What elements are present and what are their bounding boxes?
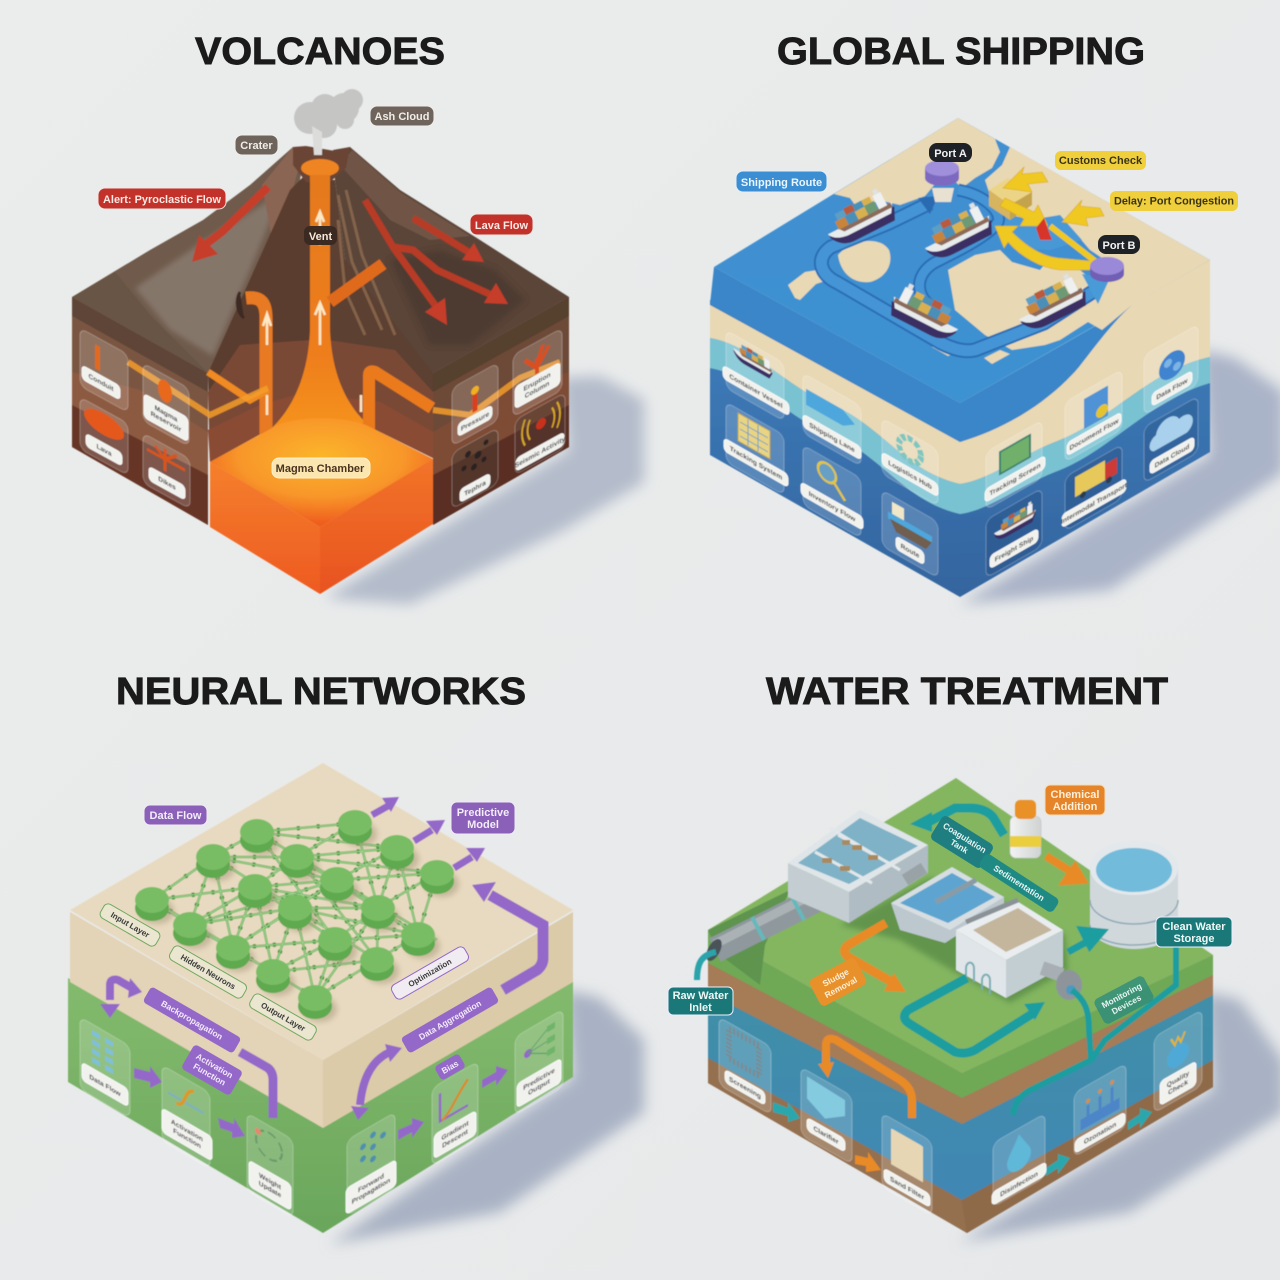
glowing channels: [128, 362, 560, 415]
label: monitoring devices: Devices: [1110, 992, 1143, 1016]
chemical bottle: [1010, 800, 1041, 858]
icon panel: eruption: Pressure: [461, 410, 489, 433]
icon panel: magma reservoir: Magma: [155, 404, 177, 424]
neural nodes: [135, 810, 454, 1019]
panel: microfiltration: Ozonation: [1084, 1120, 1116, 1146]
panel: clarifier: [801, 1067, 852, 1164]
route ribbons: [821, 190, 1110, 351]
icon panel: magma reservoir: Reservoir: [151, 410, 181, 434]
panel: logistics hub: Logistics Hub: [888, 459, 932, 492]
label: shipping route: [736, 171, 827, 192]
purple small flow arrows: [134, 1066, 508, 1140]
neural connections: [152, 823, 437, 998]
label: output layer: Output Layer: [259, 1001, 307, 1033]
label: sedimentation: [978, 852, 1060, 914]
tank 2 sedimentation: [891, 867, 1004, 943]
panel: microfiltration: [1074, 1063, 1126, 1157]
label: activation function: Function: [191, 1061, 228, 1088]
panel: quality check: [1154, 1010, 1202, 1113]
icon panel: seismic: Eruption: [523, 371, 551, 393]
label: magma chamber: Magma Chamber: [276, 463, 365, 475]
water panels right: [992, 1010, 1202, 1208]
label: lava flow: [470, 214, 533, 235]
panel: gradient descent: [432, 1061, 478, 1166]
title: volcanoes: VOLCANOES: [195, 31, 445, 73]
panel: tracking screen: [985, 418, 1045, 511]
label: predictive model: [451, 802, 515, 834]
panel: data flow: [80, 1017, 130, 1118]
label: coagulation tank: [929, 814, 995, 870]
panel: globe: Data Flow: [1156, 376, 1188, 402]
label: input layer: Input Layer: [109, 910, 151, 940]
label: output layer: [248, 992, 318, 1042]
label: monitoring devices: Monitoring: [1100, 981, 1143, 1010]
panel: volcano block: [72, 89, 644, 604]
icon panel: monitoring: Seismic Activity: [515, 435, 565, 470]
label: sludge removal: [808, 957, 868, 1007]
label: input layer: [98, 902, 162, 948]
connector pipe: [905, 868, 924, 880]
label: backpropagation: Backpropagation: [159, 998, 225, 1042]
water ground shadow: [960, 992, 1280, 1242]
panel: logistics hub: [882, 418, 938, 506]
panel: truck: [1061, 441, 1128, 533]
label: activation function: [181, 1044, 243, 1096]
label: port A: [929, 143, 972, 162]
land north: [834, 118, 1000, 212]
magma chamber left face: [210, 462, 320, 594]
green left: [68, 978, 323, 1233]
panel: tracking system: Tracking System: [730, 445, 782, 482]
panel: sand filter: Sand Filter: [890, 1175, 924, 1202]
panel: vessel: [986, 488, 1042, 578]
label: clean water storage: Storage: [1174, 933, 1214, 945]
label: delay: Delay: Port Congestion: [1114, 196, 1234, 208]
icon panel: conduit: Conduit: [89, 372, 114, 394]
icon panel: seismic: [513, 328, 562, 417]
label: predictive model: Model: [467, 819, 499, 831]
islands: [932, 342, 1010, 364]
label: ash cloud: Ash Cloud: [374, 111, 430, 123]
ship 3: [886, 280, 967, 345]
panel: quality check: Check: [1168, 1078, 1188, 1097]
panel: screen: [719, 1017, 771, 1115]
sea gulf: [1000, 212, 1082, 250]
label: data flow pill: [144, 805, 207, 825]
panel: forward propagation: Forward: [358, 1172, 384, 1194]
tank 1 screening: [788, 810, 928, 923]
label: raw water inlet: Inlet: [689, 1002, 712, 1014]
label: ash cloud: [370, 106, 434, 126]
water dark shading: [708, 890, 790, 985]
label: crater: Crater: [240, 140, 273, 152]
label: port A: Port A: [934, 148, 967, 160]
teal small arrow to tank: [1068, 930, 1102, 952]
orange sludge arrow: [844, 923, 906, 992]
panel: tracking screen: Tracking Screen: [990, 461, 1040, 498]
flow arrows in conduit: [263, 212, 361, 415]
beige right: [323, 912, 573, 1128]
label: hidden neurons: Hidden Neurons: [179, 953, 237, 992]
panel: weight update: [247, 1113, 293, 1218]
label: crater: [235, 135, 278, 155]
panel: container vessel: Container Vessel: [729, 372, 783, 410]
label: chemical addition: [1045, 785, 1105, 815]
cut wall left: [208, 175, 312, 462]
right slope: [333, 147, 569, 373]
water top: [708, 778, 1213, 1073]
right outer face: [433, 297, 569, 525]
label: lava flow: Lava Flow: [475, 220, 529, 232]
label: predictive model: Predictive: [457, 807, 509, 819]
panel: inventory flow: [801, 444, 863, 539]
label: vent: [304, 226, 337, 245]
panels right: [452, 328, 565, 509]
arrow: pyroclastic flow: [192, 187, 268, 262]
pump: [1042, 968, 1082, 1000]
label: shipping route: Shipping Route: [741, 177, 822, 189]
panel: globe: [1144, 324, 1198, 415]
panel: activation function: Activation: [171, 1118, 203, 1144]
customs box: [989, 178, 1032, 220]
node shadows: [140, 821, 459, 1022]
purple feedback arrow right: [472, 882, 543, 990]
magma chamber right face: [320, 459, 433, 594]
side vents: [208, 264, 432, 435]
title: global shipping: GLOBAL SHIPPING: [777, 31, 1145, 73]
crater: [293, 146, 350, 182]
neural ground shadow: [330, 990, 644, 1244]
panel: gradient descent: Gradient: [441, 1119, 469, 1142]
label: coagulation tank: Tank: [949, 837, 970, 856]
panel: shipping lane: Shipping Lane: [809, 421, 855, 454]
shipping ground shadow: [960, 350, 1280, 604]
label: sludge removal: Removal: [823, 975, 859, 1000]
label: monitoring devices: [1093, 974, 1155, 1026]
panel: route: Route: [901, 542, 919, 560]
teal outlet pipes: [1013, 947, 1176, 1115]
panel: sand filter: [882, 1113, 932, 1216]
label: customs check: Customs Check: [1059, 155, 1143, 167]
panel: water block: [668, 778, 1280, 1242]
orange arrow bottle to tank: [1046, 856, 1082, 881]
slab right curve: [960, 305, 1132, 442]
label: backpropagation: [142, 986, 242, 1054]
icon panel: dikes: Dikes: [158, 475, 176, 492]
panel: shipping block: [710, 118, 1280, 604]
label: clean water storage: Clean Water: [1162, 921, 1226, 933]
label: delay: [1110, 191, 1238, 211]
panel: weight update: Update: [259, 1179, 281, 1200]
panel: clarifier: Clarifier: [814, 1125, 839, 1146]
port A marker: [925, 160, 959, 202]
label: bias: [434, 1053, 466, 1081]
label: data aggregation: Data Aggregation: [417, 998, 483, 1042]
green right: [323, 978, 573, 1233]
label: pyroclastic: Alert: Pyroclastic Flow: [103, 194, 221, 206]
cylinder clean water tank: [1090, 841, 1178, 949]
tank 3 filter: [956, 900, 1063, 998]
panel: gradient descent: Descent: [442, 1127, 468, 1150]
left outer face: [72, 297, 208, 525]
equipment shadows: [840, 878, 1068, 1003]
panel: cloud: [1144, 396, 1198, 483]
conduit and magma flare: [210, 175, 433, 527]
panel: forward propagation: [346, 1112, 396, 1217]
panel: quality check: Quality: [1167, 1069, 1189, 1090]
panel: screen: Screening: [729, 1075, 761, 1101]
label: vent: Vent: [309, 231, 332, 243]
panel: activation function: [162, 1065, 212, 1170]
label: customs check: [1055, 151, 1146, 170]
icon panel: dikes: [143, 433, 190, 509]
label: hidden neurons: [168, 944, 248, 1000]
shipping right panels: [985, 324, 1198, 578]
label: chemical addition: Addition: [1053, 801, 1098, 813]
panel: container vessel: [723, 328, 789, 424]
water right face: [962, 955, 1213, 1233]
icon panel: monitoring: [515, 392, 565, 475]
icon panel: tephra: [452, 428, 498, 509]
magma chamber top: [210, 418, 433, 527]
ship 1: [819, 185, 900, 250]
orange loop on left face: [818, 1039, 912, 1118]
right face bands: [960, 260, 1210, 597]
label: coagulation tank: Coagulation: [941, 821, 988, 855]
red alert marker: [1036, 218, 1052, 240]
panel: weight update: Weight: [259, 1171, 282, 1192]
label: data flow pill: Data Flow: [150, 810, 202, 822]
panel: forward propagation: Propagation: [352, 1176, 390, 1206]
purple arrow inner left: [240, 1052, 273, 1118]
neural panels right: [346, 1009, 563, 1217]
panel: prediction output: Output: [528, 1077, 550, 1097]
panel: prediction output: [515, 1009, 563, 1115]
panel: tracking system: [724, 401, 788, 497]
label: activation function: Activation: [194, 1051, 235, 1080]
panel: prediction output: Predictive: [523, 1066, 555, 1092]
panel: truck: Intermodal Transport: [1061, 481, 1128, 526]
volcano ground shadow: [325, 376, 644, 604]
label: sludge removal: Sludge: [821, 966, 851, 989]
label: bias: Bias: [440, 1058, 461, 1076]
label: magma chamber: [272, 458, 370, 478]
port B marker: [1090, 257, 1124, 282]
panel: route: [882, 490, 938, 578]
ship 2: [916, 199, 997, 264]
panel: disinfection: [992, 1113, 1046, 1208]
icon panel: lava dome: Lava: [96, 442, 112, 458]
label: port B: [1098, 235, 1140, 254]
label: port B: Port B: [1102, 240, 1136, 252]
panels left: [80, 328, 190, 509]
shipping left panels: [723, 328, 938, 578]
left slope: [72, 147, 305, 373]
neural panels left: [80, 1017, 293, 1218]
water panels left: [719, 1017, 932, 1216]
ocean front slab: [710, 267, 960, 442]
purple arrow inner right: [351, 1044, 402, 1120]
pipe: [697, 896, 815, 980]
purple output arrows: [372, 797, 485, 868]
panel: cloud: Data Cloud: [1155, 443, 1189, 470]
purple arrow top-left: [100, 978, 142, 1018]
icon panel: magma reservoir: [143, 363, 189, 446]
label: pyroclastic: [98, 188, 226, 209]
label: optimization: [390, 945, 470, 1001]
ship 4: [1010, 270, 1091, 335]
icon panel: eruption: [452, 363, 498, 446]
label: raw water inlet: Raw Water: [673, 990, 729, 1002]
panel: disinfection: Disinfection: [1000, 1170, 1038, 1199]
water left face: [708, 930, 967, 1233]
label: clean water storage: [1156, 917, 1232, 947]
ocean top: [714, 118, 1210, 403]
panel: inventory flow: Inventory Flow: [809, 490, 856, 524]
teal arrow top: [910, 808, 1004, 835]
left face bands: [710, 300, 960, 597]
panel: shipping lane: [803, 373, 861, 466]
icon panel: lava dome: [80, 397, 128, 475]
beige left: [70, 912, 323, 1128]
icon panel: conduit: [80, 328, 128, 412]
cut wall right: [328, 180, 433, 458]
title: water treatment: WATER TREATMENT: [766, 671, 1168, 713]
label: data aggregation: [400, 986, 500, 1054]
panel: activation function: Function: [173, 1127, 201, 1150]
small flow arrows: [773, 1102, 1152, 1176]
land far west: [788, 268, 834, 300]
smoke: ash cloud: [294, 89, 363, 155]
label: sedimentation: Sedimentation: [992, 863, 1046, 903]
panel: vessel: Freight Ship: [995, 534, 1034, 564]
yellow customs arrows: [995, 167, 1104, 270]
land east and south: [948, 147, 1210, 350]
beige top: [70, 763, 573, 1060]
label: optimization: Optimization: [407, 957, 453, 989]
panel: data flow: Data Flow: [89, 1073, 121, 1099]
panel: neural block: [68, 763, 644, 1244]
panel: documents: [1065, 370, 1122, 462]
title: neural networks: NEURAL NETWORKS: [116, 671, 526, 713]
land west: [838, 241, 890, 282]
label: chemical addition: Chemical: [1051, 789, 1099, 801]
icon panel: seismic: Column: [525, 379, 549, 400]
teal loop: [904, 978, 1045, 1053]
label: raw water inlet: [668, 987, 733, 1015]
arrow: lava flow: [365, 200, 508, 325]
icon panel: tephra: Tephra: [464, 479, 486, 498]
panel: documents: Document Flow: [1069, 417, 1119, 452]
